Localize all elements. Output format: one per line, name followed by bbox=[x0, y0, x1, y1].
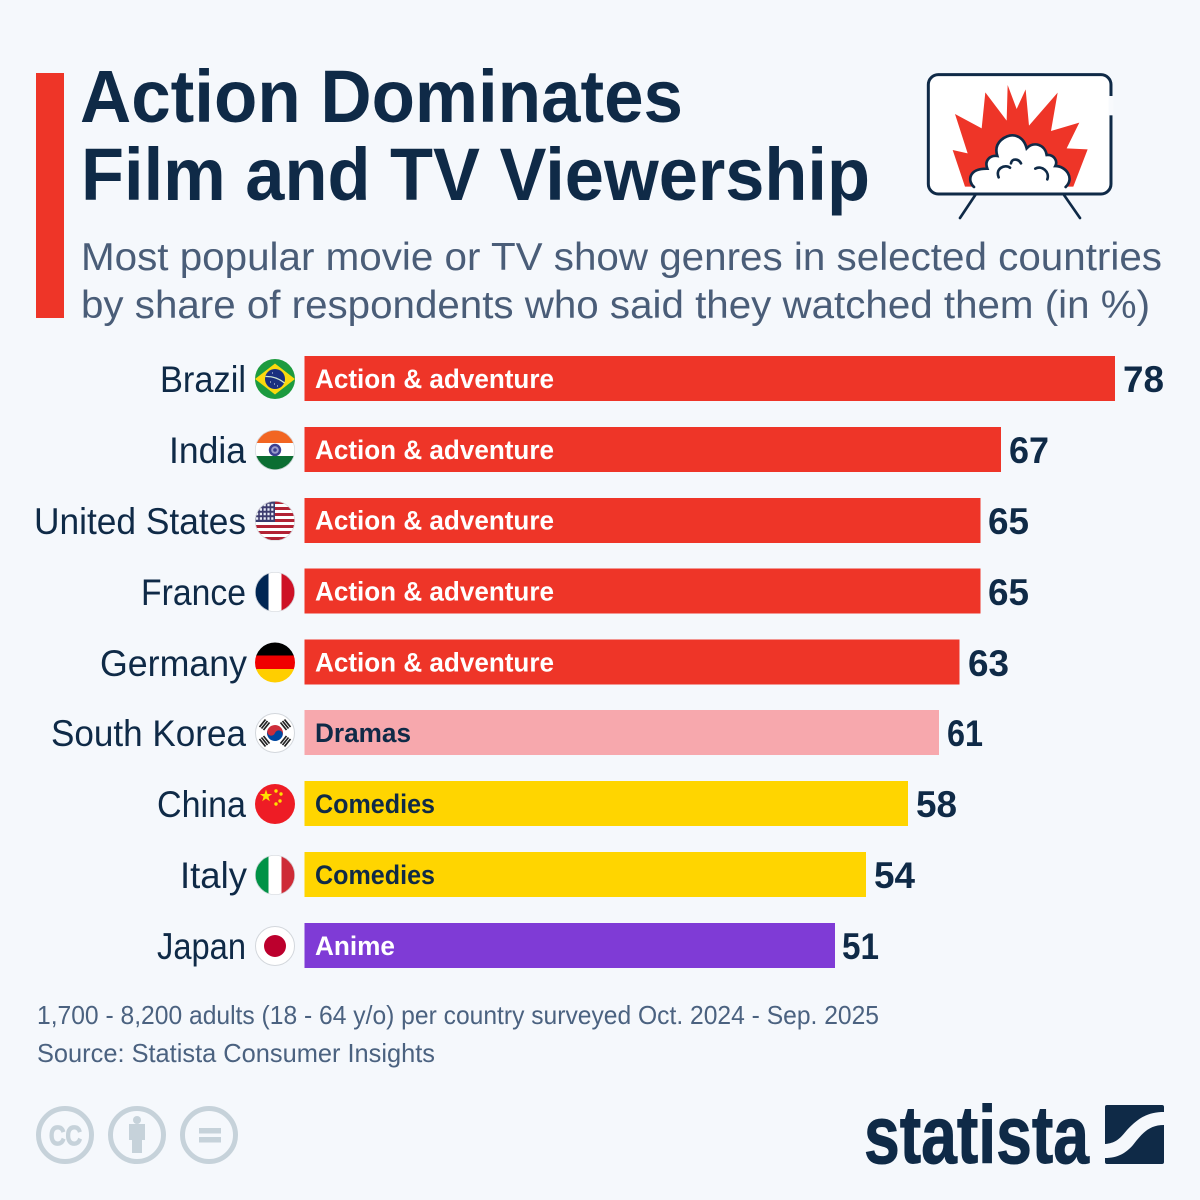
row: South Korea bbox=[51, 710, 983, 755]
row: Brazil: Action & adventure bbox=[315, 364, 554, 394]
icon: China flag bbox=[255, 784, 295, 824]
row: China: 58 bbox=[916, 784, 957, 825]
row: United States: Action & adventure bbox=[315, 506, 554, 536]
row: Italy: 54 bbox=[874, 855, 915, 896]
icon: India flag bbox=[255, 430, 295, 470]
row: China: China bbox=[157, 784, 246, 825]
icon: Italy flag bbox=[255, 855, 295, 895]
row: South Korea: 61 bbox=[947, 713, 983, 754]
row: Brazil: 78 bbox=[1123, 359, 1164, 400]
row: Brazil bbox=[160, 356, 1164, 401]
row: Japan: Japan bbox=[157, 926, 246, 967]
row: France: France bbox=[141, 572, 246, 613]
row: United States: 65 bbox=[988, 501, 1029, 542]
footnote and source: 1,700 - 8,200 adults (18 - 64 y/o) per country surveyed Oct. 2024 - Sep. 2025 bbox=[37, 1000, 879, 1030]
row: India: 67 bbox=[1009, 430, 1049, 471]
accent bar bbox=[36, 73, 64, 318]
row: Japan: Anime bbox=[315, 931, 395, 961]
row: India: India bbox=[169, 430, 246, 471]
Statista logo: statista bbox=[864, 1090, 1090, 1181]
row: Germany: 63 bbox=[968, 643, 1009, 684]
title bbox=[80, 55, 870, 216]
row: Italy: Comedies bbox=[315, 860, 435, 890]
row: Italy bbox=[180, 852, 915, 897]
icon: United States flag bbox=[255, 501, 295, 541]
row: South Korea: South Korea bbox=[51, 713, 246, 754]
icon: Creative Commons licence badges: CC bbox=[49, 1120, 82, 1151]
row: India bbox=[169, 427, 1049, 472]
icon: South Korea flag bbox=[256, 714, 294, 752]
row: Japan: 51 bbox=[842, 926, 879, 967]
row: France: 65 bbox=[988, 572, 1029, 613]
row: South Korea: Dramas bbox=[315, 718, 411, 748]
row: Brazil: Brazil bbox=[160, 359, 246, 400]
title: Film and TV Viewership bbox=[81, 133, 870, 216]
icon: France flag bbox=[255, 572, 295, 612]
footnote and source: Source: Statista Consumer Insights bbox=[37, 1038, 435, 1068]
row: France: Action & adventure bbox=[315, 576, 554, 606]
row: Germany: Action & adventure bbox=[315, 648, 554, 678]
icon: Germany flag bbox=[255, 642, 295, 683]
title: Action Dominates bbox=[80, 55, 683, 138]
bar chart bbox=[34, 356, 1164, 968]
subtitle: Most popular movie or TV show genres in selected countries bbox=[81, 236, 1162, 279]
icon: Japan flag bbox=[256, 926, 294, 966]
row: China bbox=[157, 781, 957, 826]
row: United States: United States bbox=[34, 501, 246, 542]
row: Japan bbox=[157, 923, 879, 968]
row: United States bbox=[34, 498, 1029, 543]
icon: TV with explosion bbox=[928, 75, 1113, 218]
row: Italy: Italy bbox=[180, 855, 247, 896]
icon: Brazil flag bbox=[255, 359, 295, 399]
footnote and source bbox=[37, 1000, 879, 1068]
icon: Creative Commons licence badges bbox=[38, 1108, 236, 1162]
subtitle bbox=[81, 236, 1162, 327]
row: France bbox=[141, 568, 1029, 614]
row: Germany bbox=[100, 640, 1009, 684]
subtitle: by share of respondents who said they watched them (in %) bbox=[81, 284, 1150, 327]
row: Germany: Germany bbox=[100, 643, 247, 684]
row: China: Comedies bbox=[315, 789, 435, 819]
row: India: Action & adventure bbox=[315, 435, 554, 465]
